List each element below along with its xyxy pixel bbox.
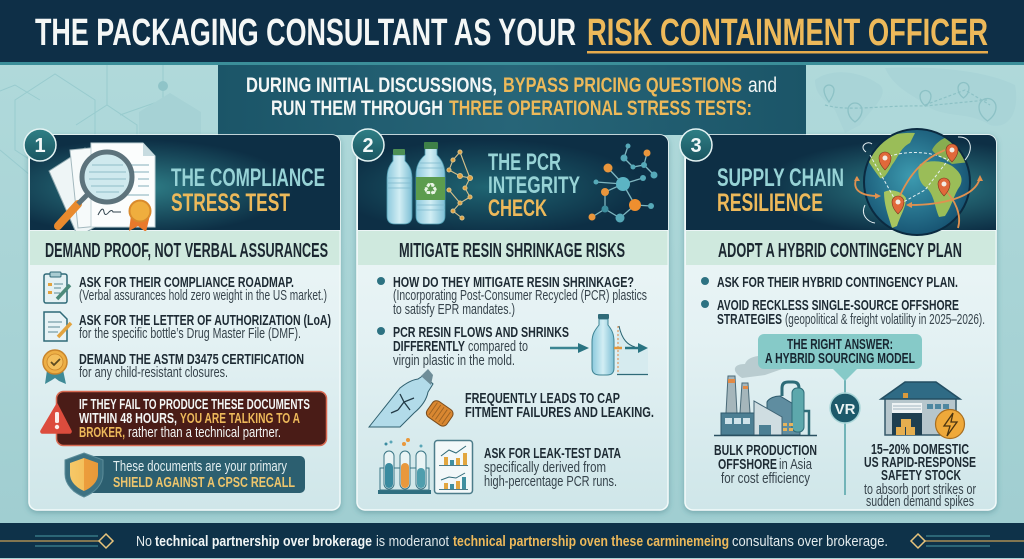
footer banner — [0, 523, 1024, 559]
callout: CPSC recall shield — [65, 453, 305, 497]
callout: broker warning — [41, 392, 327, 446]
icon: warning triangle — [41, 404, 71, 433]
bullet: resin shrinkage: (Incorporating Post-Consumer Recycled (PCR) plastics — [393, 288, 647, 304]
panel: supply chain resilience — [680, 129, 996, 510]
background hexagon pattern — [0, 65, 201, 176]
header title — [488, 149, 580, 222]
text: domestic safety stock: sudden demand spikes — [866, 494, 974, 510]
header: PCR — [358, 135, 668, 230]
bullet: PCR flow: PCR RESIN FLOWS AND SHRINKS — [393, 324, 569, 341]
footer text: No — [136, 533, 152, 550]
header title: STRESS TEST — [171, 189, 290, 217]
bullet: resin shrinkage: to satisfy EPR mandates.) — [393, 302, 515, 318]
divider with VR badge — [830, 380, 860, 495]
icon: offshore factory — [714, 356, 817, 436]
footer text — [136, 533, 888, 550]
decorative left line and diamond — [0, 534, 113, 548]
intro text: THREE OPERATIONAL STRESS TESTS: — [449, 97, 752, 120]
bullet: resin shrinkage: HOW DO THEY MITIGATE RESIN SHRINKAGE? — [393, 274, 634, 291]
callout: broker warning: BROKER, — [79, 425, 125, 441]
subheading band: MITIGATE RESIN SHRINKAGE RISKS — [399, 240, 625, 262]
decorative right line and diamond — [911, 534, 1024, 548]
text: bulk production offshore: in Asia — [779, 457, 813, 473]
bullet: avoid single-source: STRATEGIES — [717, 311, 782, 328]
subheading band: DEMAND PROOF, NOT VERBAL ASSURANCES — [45, 240, 328, 262]
text: compliance roadmap: ASK FOR THEIR COMPLIANCE ROADMAP. — [79, 274, 294, 291]
bullet: PCR flow: virgin plastic in the mold. — [393, 353, 515, 369]
text: domestic safety stock: 15–20% DOMESTIC — [871, 441, 969, 458]
text: leak-test data: specifically derived from — [484, 460, 606, 476]
footer text: is moderanot — [376, 533, 450, 550]
number badge 1 — [24, 129, 56, 161]
callout: the right answer: A HYBRID SOURCING MODEL — [765, 350, 915, 367]
callout: the right answer: THE RIGHT ANSWER: — [787, 336, 893, 353]
callout: broker warning: rather than a technical partner. — [128, 425, 281, 441]
text: compliance roadmap — [79, 274, 327, 304]
header title: THE COMPLIANCE — [171, 164, 325, 192]
icon: globe with routes — [854, 129, 983, 235]
icon: molecule — [588, 144, 658, 222]
number badge 1: 1 — [34, 135, 46, 157]
subheading band — [358, 231, 668, 265]
icon: clipboard — [44, 272, 70, 303]
header title: SUPPLY CHAIN — [717, 164, 844, 192]
footer text: technical partnership over brokerage — [155, 533, 372, 550]
header: compliance — [30, 135, 340, 237]
bullet: PCR flow: compared to — [468, 339, 528, 355]
title text: THE PACKAGING CONSULTANT AS YOUR — [35, 12, 576, 54]
text: letter of authorization: for the specific bottle’s Drug Master File (DMF). — [79, 326, 301, 342]
icon: domestic warehouse — [881, 382, 964, 438]
text: bulk production offshore — [714, 442, 817, 487]
background world map with route pins — [815, 67, 1016, 133]
icon: documents, magnifier and seal — [49, 143, 155, 237]
icon: cracked bottle and cap — [369, 369, 455, 428]
bullet: PCR flow: DIFFERENTLY — [393, 338, 465, 355]
intro text: and — [748, 74, 777, 97]
number badge 3: 3 — [690, 135, 702, 157]
text: cap fitment — [465, 390, 654, 421]
icon: test tubes — [378, 438, 431, 494]
text: bulk production offshore: BULK PRODUCTION — [714, 442, 817, 459]
text: bulk production offshore: for cost efficiency — [721, 471, 811, 487]
divider with VR badge: VR — [835, 401, 856, 418]
text: leak-test data: high-percentage PCR runs. — [484, 474, 617, 490]
intro band background — [218, 65, 806, 135]
text: cap fitment: FITMENT FAILURES AND LEAKING. — [465, 404, 654, 421]
icon: shrinkage diagram with arrows — [550, 314, 648, 375]
header title: RESILIENCE — [717, 189, 823, 217]
text: ASTM certification: for any child-resistant closures. — [79, 365, 228, 381]
icon: recycled bottles: ♻ — [423, 180, 438, 199]
header title: THE PCR — [488, 149, 561, 176]
callout: broker warning: WITHIN 48 HOURS, — [79, 411, 177, 427]
icon: data charts — [434, 440, 472, 494]
icon: recycled bottles — [387, 142, 472, 224]
icon: document with pencil — [44, 312, 71, 341]
icon: polymer chain — [447, 150, 472, 220]
header title — [171, 164, 325, 217]
header title: CHECK — [488, 195, 547, 222]
number badge 2: 2 — [362, 135, 374, 157]
text: ASTM certification: DEMAND THE ASTM D3475 CERTIFICATION — [79, 351, 304, 368]
text: domestic safety stock: SAFETY STOCK — [881, 467, 961, 484]
number badge 3 — [680, 129, 712, 161]
text: letter of authorization: ASK FOR THE LETTER OF AUTHORIZATION (LoA) — [79, 312, 331, 329]
panel: compliance stress test — [24, 129, 340, 510]
text: ASTM certification — [79, 351, 304, 381]
header title: INTEGRITY — [488, 172, 580, 199]
intro text: DURING INITIAL DISCUSSIONS, — [246, 74, 497, 97]
callout: the right answer — [758, 334, 922, 381]
number badge 2 — [352, 129, 384, 161]
text: leak-test data: ASK FOR LEAK-TEST DATA — [484, 445, 621, 462]
intro text: BYPASS PRICING QUESTIONS — [503, 74, 742, 97]
bullet: PCR flow — [377, 324, 569, 369]
text: domestic safety stock: US RAPID-RESPONSE — [864, 454, 976, 471]
callout: CPSC recall shield: SHIELD AGAINST A CPSC RECALL — [113, 474, 295, 491]
callout: CPSC recall shield: These documents are your primary — [113, 459, 288, 475]
footer text: technical partnership oven these carminemeing — [453, 533, 729, 550]
intro text — [246, 74, 777, 120]
bullet: resin shrinkage — [377, 274, 647, 318]
intro text: RUN THEM THROUGH — [271, 97, 443, 120]
text: domestic safety stock — [864, 441, 976, 510]
panel: PCR integrity check — [352, 129, 668, 510]
text: bulk production offshore: OFFSHORE — [718, 456, 777, 473]
title banner — [0, 0, 1024, 65]
text: letter of authorization — [79, 312, 331, 342]
bullet: avoid single-source — [701, 297, 985, 328]
subheading band — [686, 231, 996, 265]
icon: certification badge — [43, 350, 67, 384]
text: leak-test data — [484, 445, 621, 490]
text: compliance roadmap: (Verbal assurances hold zero weight in the US market.) — [79, 288, 327, 304]
footer text: consultans over brokerage. — [732, 533, 888, 550]
text: domestic safety stock: to absorb port strikes or — [864, 482, 976, 498]
header title — [717, 164, 844, 217]
icon: shield — [65, 453, 103, 497]
header: supply chain — [686, 135, 996, 230]
callout: broker warning: IF THEY FAIL TO PRODUCE THESE DOCUMENTS — [79, 397, 310, 413]
callout: broker warning: YOU ARE TALKING TO A — [180, 411, 300, 427]
text: cap fitment: FREQUENTLY LEADS TO CAP — [465, 390, 620, 407]
subheading band — [30, 231, 340, 265]
